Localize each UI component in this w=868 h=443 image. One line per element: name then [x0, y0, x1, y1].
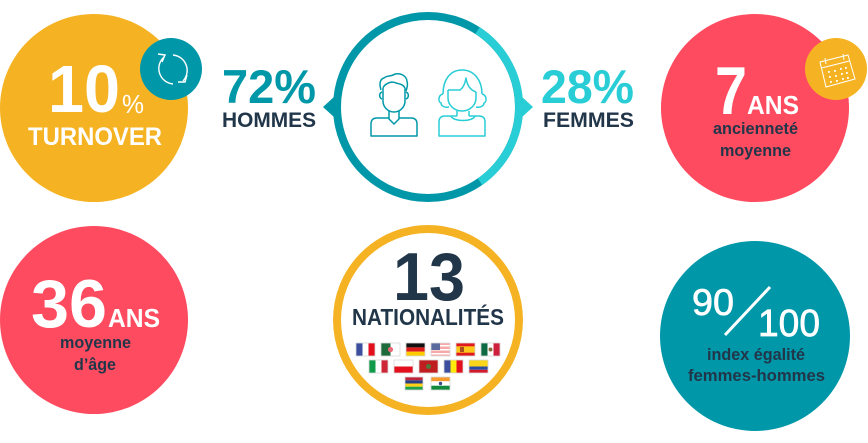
nationalities label: NATIONALITÉS — [352, 303, 504, 330]
text: men share: HOMMES — [222, 109, 316, 132]
seniority figure: 7 — [715, 53, 747, 129]
panel: equality index — [660, 241, 850, 431]
slash — [725, 287, 770, 335]
text: men share: 72% — [222, 60, 316, 113]
flag: Morocco — [419, 360, 438, 373]
flag: Mauritius — [405, 377, 423, 390]
seniority unit: ANS — [747, 90, 799, 120]
flags — [356, 343, 500, 390]
icon: woman — [439, 70, 486, 136]
flag: India — [431, 377, 450, 390]
icon: refresh — [140, 38, 202, 100]
panel: nationalities — [337, 229, 519, 411]
flag: Colombia — [469, 360, 488, 373]
flag: Italy — [369, 360, 388, 373]
icon: calendar — [805, 38, 867, 100]
icon: man — [371, 74, 417, 136]
percent sign: % — [122, 89, 144, 119]
flag: Mexico — [481, 343, 500, 356]
age unit: ANS — [108, 303, 160, 333]
age label: moyenne — [60, 334, 131, 352]
flag: Romania — [444, 360, 463, 373]
flag: Germany — [406, 343, 425, 356]
index label: index égalité — [707, 346, 805, 364]
flag: France — [356, 343, 375, 356]
flag: Spain — [456, 343, 475, 356]
age figure: 36 — [31, 266, 107, 342]
panel: seniority: moyenne — [720, 142, 791, 160]
panel: average age — [0, 226, 188, 414]
panel: seniority — [661, 14, 867, 202]
score: 90 — [692, 282, 734, 323]
flag: Poland — [394, 360, 413, 373]
seniority label: ancienneté — [713, 120, 798, 138]
turnover figure: 10 — [48, 52, 120, 127]
panel: gender ring — [323, 16, 533, 198]
nationalities figure: 13 — [393, 239, 465, 315]
panel: equality index: femmes-hommes — [688, 367, 825, 385]
text: women share: FEMMES — [543, 109, 634, 132]
flag: USA — [431, 343, 450, 356]
panel: average age: d’âge — [74, 356, 116, 374]
text: women share: 28% — [541, 60, 634, 113]
score total: 100 — [758, 303, 820, 345]
flag: Algeria — [381, 343, 400, 356]
panel: turnover — [0, 14, 202, 202]
turnover label: TURNOVER — [28, 123, 162, 151]
